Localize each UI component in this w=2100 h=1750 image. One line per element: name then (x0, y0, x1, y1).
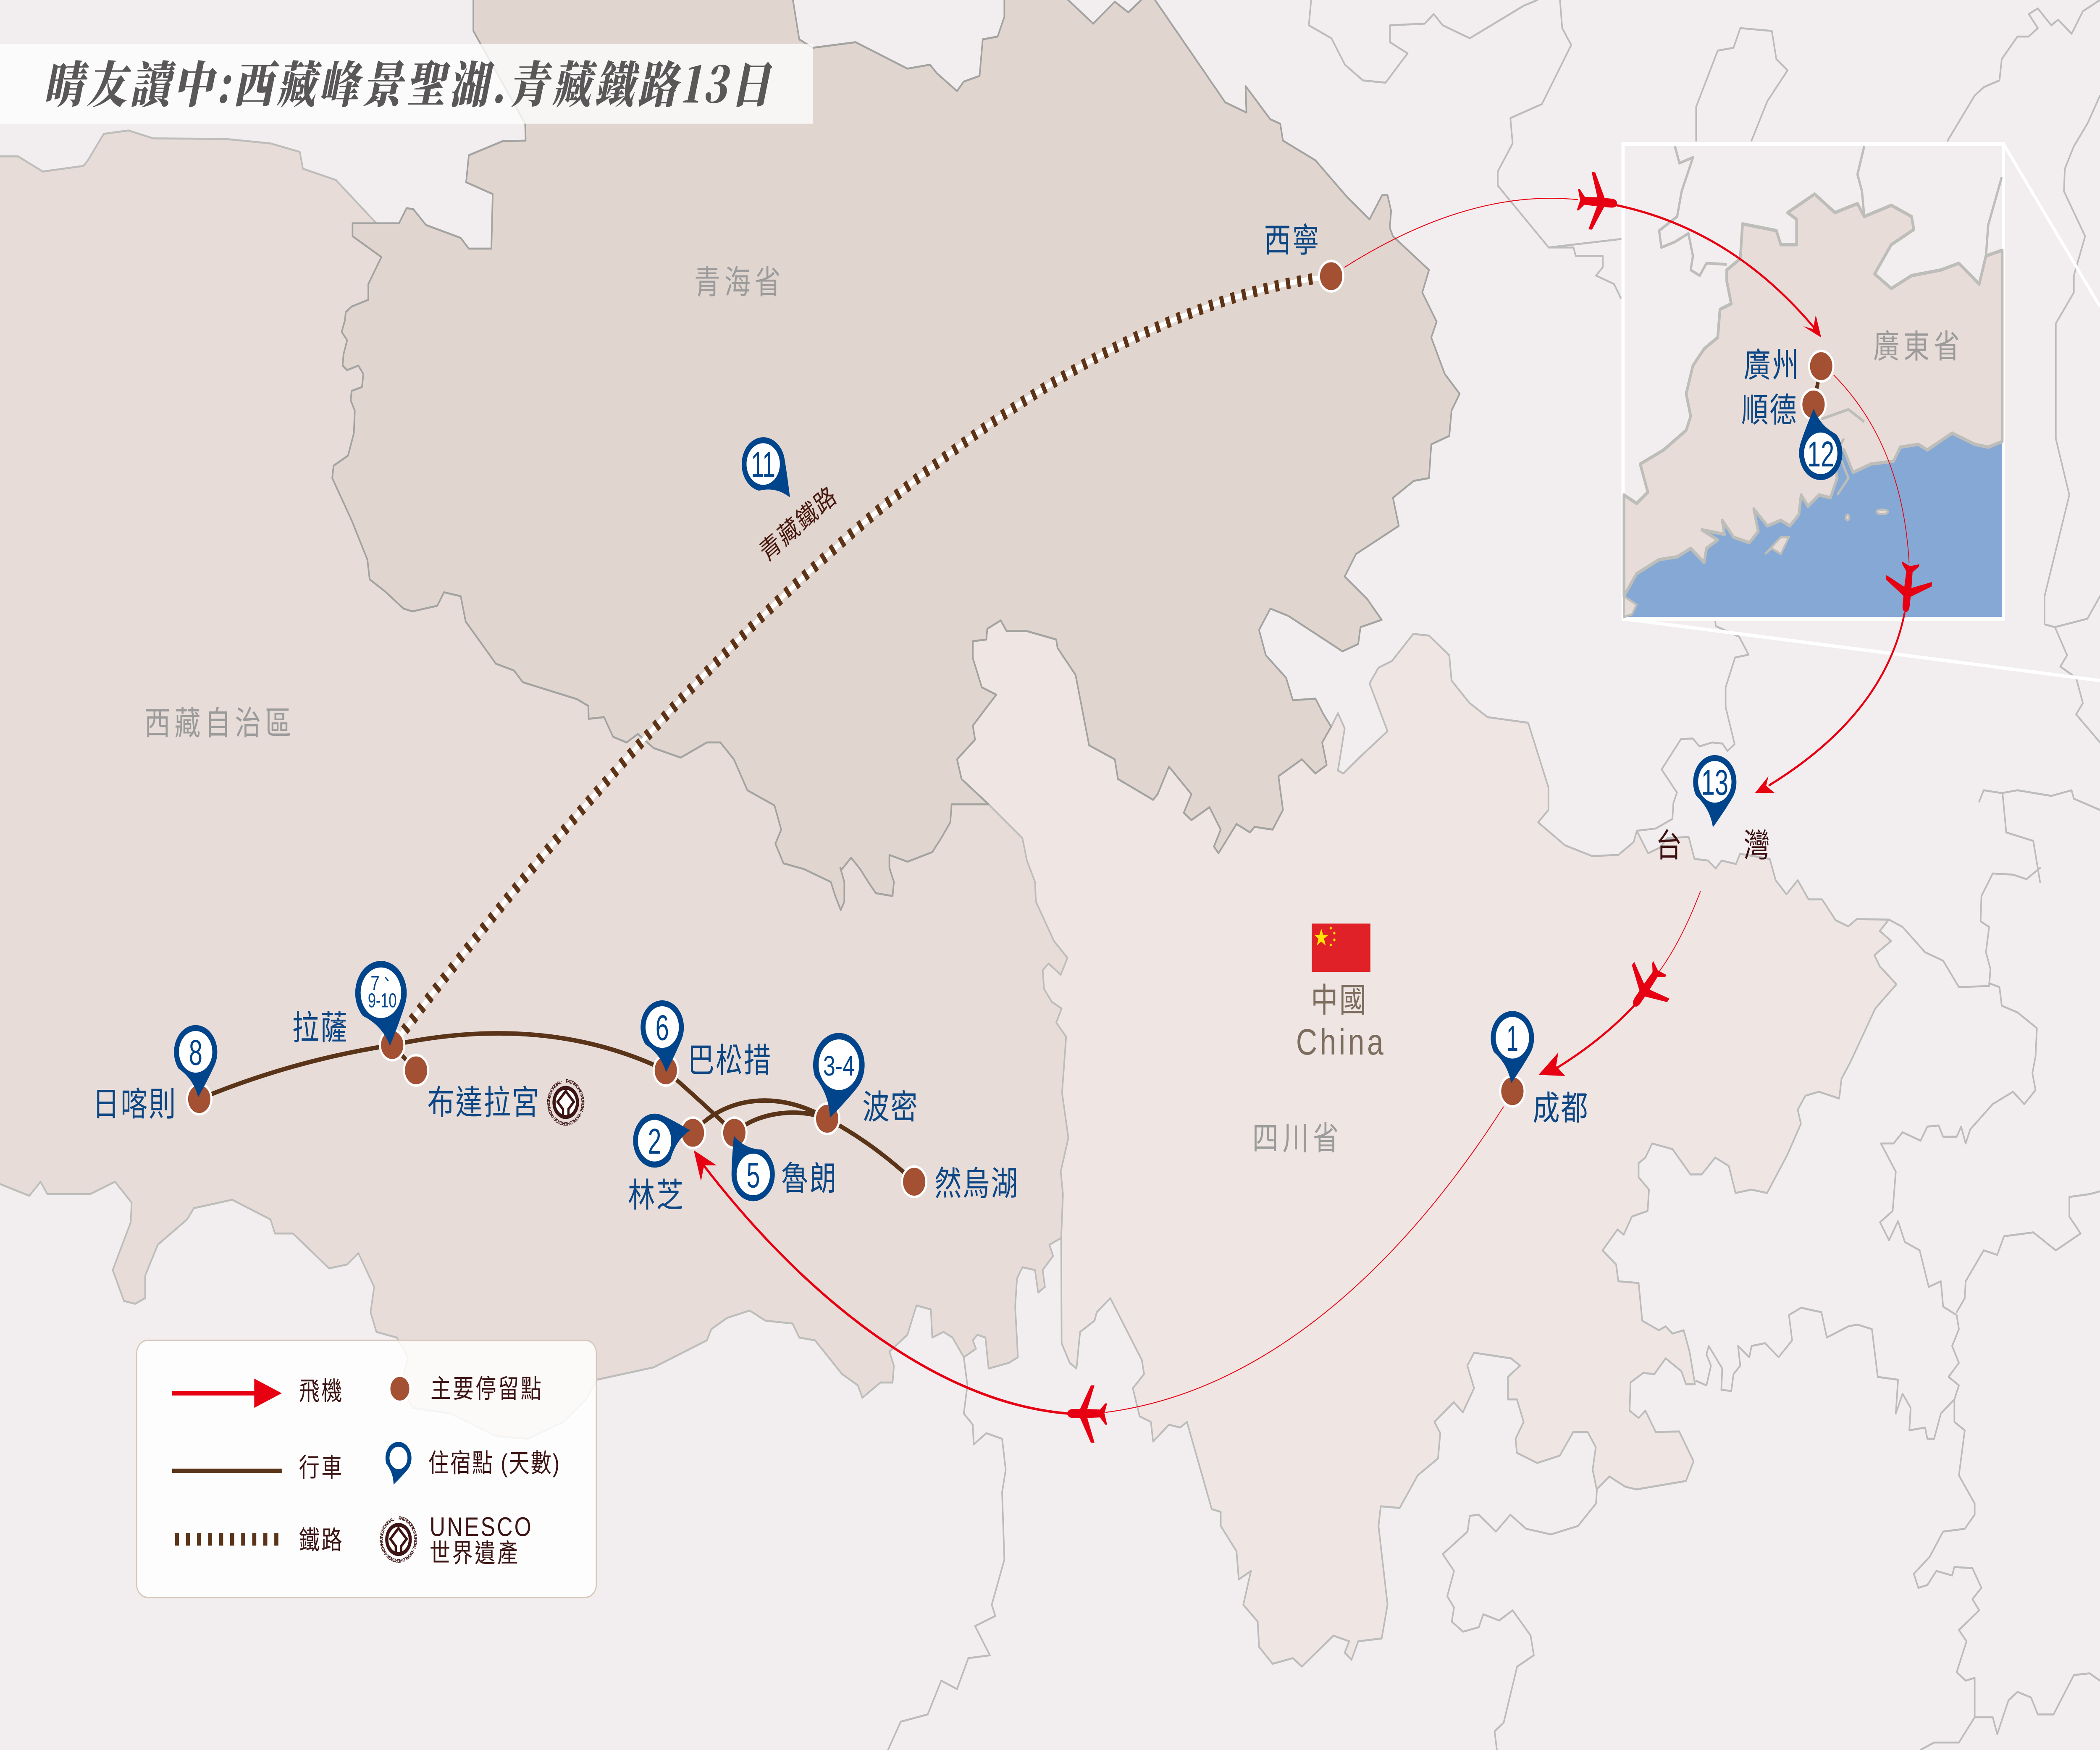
place label: Lulang: 魯朗 (781, 1160, 837, 1198)
pin: day 12: 12 (1807, 434, 1834, 474)
country label: China: China (1296, 1022, 1386, 1063)
legend panel (136, 1341, 596, 1598)
place label: Lhasa: 拉薩 (292, 1009, 349, 1047)
airplane: Chengdu flight (1068, 1385, 1107, 1443)
title text: 晴友讀中:西藏峰景聖湖.青藏鐵路13日 (44, 45, 773, 117)
pin: days 3-4 (805, 1027, 869, 1124)
place label: Xining: 西寧 (1264, 222, 1320, 260)
pin: day 8 (173, 1023, 220, 1099)
pin: day 11: 11 (751, 445, 775, 485)
legend: driving (172, 1453, 344, 1482)
arrowhead (1755, 776, 1775, 793)
pin: day 8: 8 (189, 1033, 202, 1073)
place label: Rikaze: 日喀則 (92, 1086, 177, 1123)
pin: day 6: 6 (656, 1008, 669, 1048)
legend: flight: 飛機 (299, 1376, 344, 1406)
railway label: 青藏鐵路 (756, 480, 841, 567)
flight: Chengdu to Linzhi (694, 1107, 1503, 1414)
neighbouring province borders (888, 0, 2100, 1750)
region: Qinghai province (332, 0, 1460, 910)
pin: day 5: 5 (746, 1155, 760, 1195)
pin: day 11 (733, 426, 805, 517)
legend: flight (172, 1376, 344, 1408)
pin: days 7, 9-10: 7 (370, 972, 380, 994)
legend: overnight stop: 住宿點 (天數) (428, 1448, 561, 1477)
pin: day 2 (629, 1104, 695, 1173)
pin: day 1: 1 (1507, 1019, 1518, 1059)
flight: Xining to Guangzhou (1345, 198, 1821, 338)
inset: Guangdong map (1623, 144, 2100, 681)
legend: UNESCO: UNESCO (430, 1512, 533, 1542)
airplane: Guangzhou flight (1883, 559, 1934, 616)
place label: Linzhi: 林芝 (628, 1177, 684, 1215)
province label: Sichuan: 四川省 (1252, 1120, 1343, 1157)
country label: China (1296, 982, 1386, 1063)
driving routes (199, 366, 1821, 1182)
pin: day 12 (1793, 404, 1846, 485)
airplane: Taiwan flight (1617, 950, 1677, 1024)
pin: days 3-4: 3-4 (823, 1050, 855, 1081)
inset leader lines (1623, 144, 2100, 681)
place label: Guangzhou: 廣州 (1744, 347, 1800, 384)
legend: overnight stop (381, 1439, 561, 1488)
place label: Potala Palace: 布達拉宮 (427, 1084, 540, 1122)
place label: Shunde: 順德 (1741, 392, 1798, 429)
place label: Ranwu Lake: 然烏湖 (934, 1165, 1019, 1203)
pin: days 7, 9-10: 、 (380, 970, 394, 989)
legend: UNESCO: PATRIMONIO MUNDIAL · WORLD HERITAGE · PATRIMOINE MONDIAL · (379, 1516, 417, 1564)
title band (0, 44, 813, 124)
pin: day 13: 13 (1701, 763, 1728, 803)
arrowhead (1538, 1052, 1565, 1076)
inset neighbouring borders (1659, 146, 2002, 495)
arrowhead (1803, 315, 1821, 338)
region: Tibet autonomous region (0, 131, 1068, 1439)
airplane: Xining flight (1576, 171, 1619, 232)
pin: days 7, 9-10: 9-10 (368, 989, 397, 1012)
pin: day 5 (716, 1121, 783, 1212)
region: Sichuan province (957, 620, 1896, 1666)
place label: Chengdu: 成都 (1533, 1090, 1589, 1127)
inset islands (1624, 509, 1888, 617)
arrowhead (694, 1150, 717, 1181)
legend: UNESCO (379, 1512, 533, 1568)
flight: Guangzhou to Taiwan (1755, 375, 1909, 793)
legend: UNESCO: 世界遺產 (430, 1538, 520, 1568)
pin: day 6 (638, 998, 688, 1075)
inset frame (1623, 144, 2003, 619)
pin: day 1 (1489, 1010, 1535, 1084)
legend: railway: 鐵路 (299, 1525, 344, 1555)
legend: main stop: 主要停留點 (430, 1374, 543, 1403)
flight: Taiwan to Chengdu (1538, 892, 1701, 1076)
country label: China: 中國 (1311, 982, 1368, 1019)
place label: Basongcuo: 巴松措 (688, 1042, 772, 1079)
label: Guangdong province: 廣東省 (1873, 328, 1964, 365)
railway: Qinghai-Tibet (397, 276, 1331, 1041)
legend: driving: 行車 (299, 1453, 344, 1482)
province label: Qinghai: 青海省 (694, 264, 785, 301)
place label: Bomi: 波密 (862, 1089, 919, 1126)
pin: days 7, 9-10 (350, 955, 415, 1052)
inset sea (1624, 433, 2002, 617)
flag of China (1312, 924, 1370, 972)
place label: Taiwan first character: 台 (1656, 827, 1682, 863)
pin: day 13 (1691, 754, 1738, 829)
place label: Taiwan second character: 灣 (1744, 827, 1770, 863)
inset Guangdong province (1624, 194, 2002, 596)
province label: Tibet: 西藏自治區 (144, 705, 295, 742)
pin: day 2: 2 (648, 1122, 662, 1162)
stop markers (187, 261, 1833, 1197)
UNESCO emblem on map: PATRIMONIO MUNDIAL · WORLD HERITAGE · PATRIMOINE MONDIAL · (546, 1078, 585, 1126)
